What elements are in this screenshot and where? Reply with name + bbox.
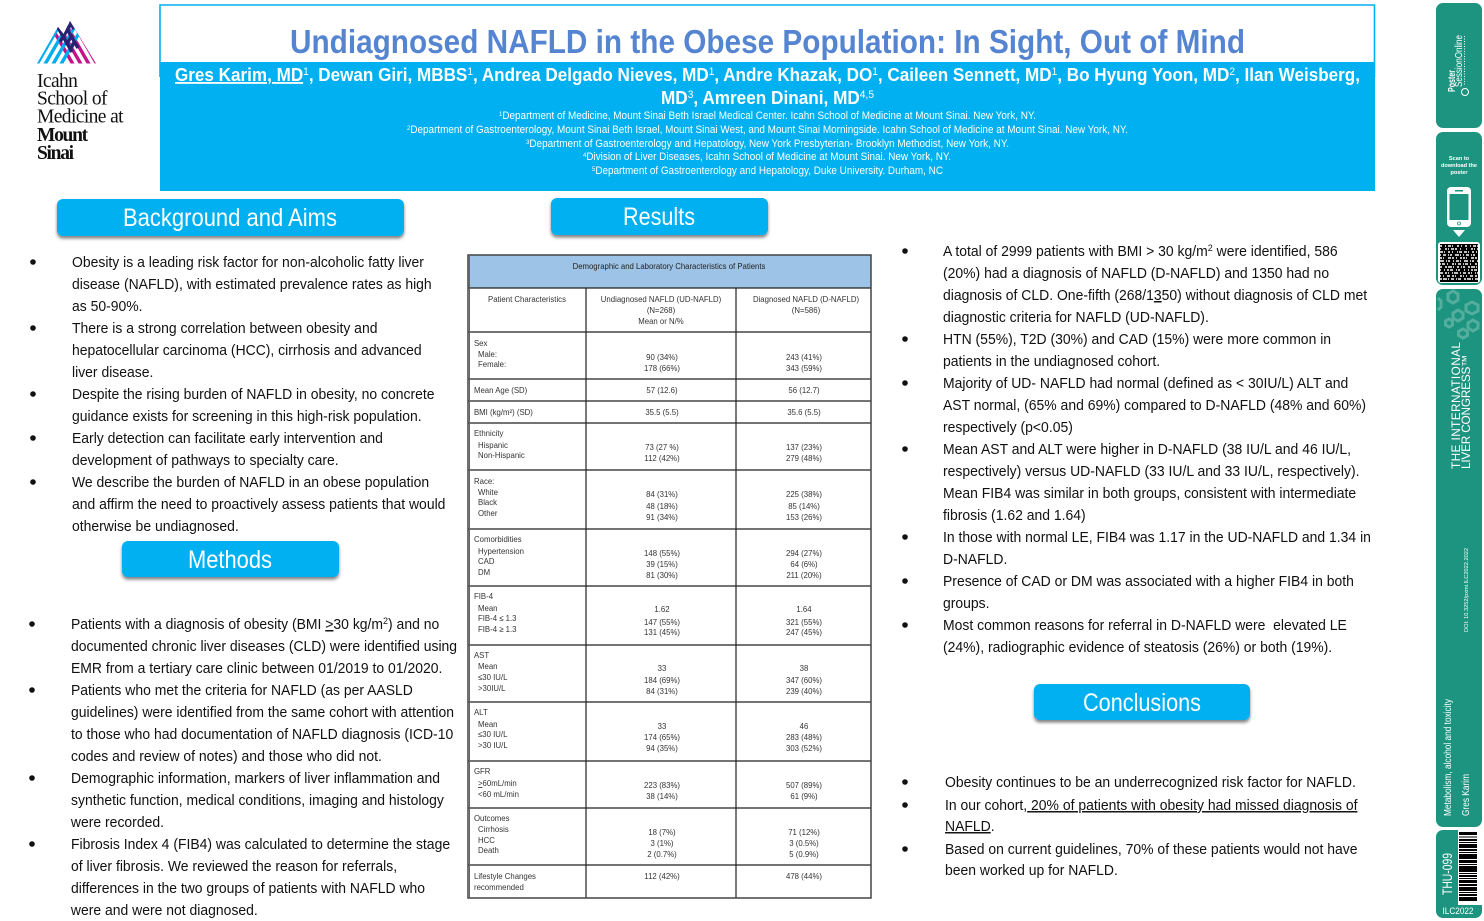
row: lifestyle changes	[474, 872, 822, 892]
row: ALT: ≤30 IU/L	[478, 730, 508, 739]
text block: methods bullets	[29, 616, 457, 919]
text block: results bullets: Presence of CAD or DM was associated with a higher FIB4 in both	[943, 574, 1354, 590]
text block: background bullets: liver disease.	[72, 365, 153, 381]
text block: background bullets: guidance exists for screening in this high-risk population.	[72, 409, 422, 425]
scan caption: download the	[1441, 163, 1477, 169]
text block: methods bullets: of liver fibrosis. We reviewed the reason for referrals,	[71, 859, 397, 875]
icon: phone	[1447, 187, 1471, 227]
panel: congress name and session	[1436, 289, 1482, 827]
icon: hexagon pattern	[1438, 291, 1478, 338]
text block: background bullets: development of pathways to specialty care.	[72, 453, 339, 469]
heading: Results	[551, 198, 768, 235]
text block: methods bullets: Patients with a diagnosis of obesity (BMI >30 kg/m	[71, 617, 383, 633]
text block: results bullets: groups.	[943, 596, 990, 612]
row: ethnicity: 112 (42%)	[644, 454, 680, 463]
row: comorbidities: 39 (15%)	[646, 560, 678, 569]
text block: methods bullets: Patients who met the criteria for NAFLD (as per AASLD	[71, 683, 413, 699]
row: FIB-4: 321 (55%)	[786, 618, 822, 627]
row: race	[474, 477, 822, 522]
row: AST: AST	[474, 651, 489, 660]
ILC2022 label: ILC2022	[1442, 906, 1474, 916]
row: FIB-4: FIB-4	[474, 592, 494, 601]
row: lifestyle changes: Lifestyle Changes	[474, 872, 536, 881]
row: ALT: 174 (65%)	[644, 733, 680, 742]
row: FIB-4: FIB-4 ≥ 1.3	[478, 625, 517, 634]
text block: methods bullets: 2	[383, 616, 388, 626]
scan caption	[1441, 156, 1477, 176]
text block: results bullets: (24%), radiographic evidence of steatosis (26%) or both (19%).	[943, 640, 1332, 656]
text block: conclusions bullets: NAFLD.	[945, 819, 995, 835]
row: ethnicity: 73 (27 %)	[645, 443, 679, 452]
text block: methods bullets: Demographic information, markers of liver inflammation and	[71, 771, 440, 787]
row: sex: 243 (41%)	[786, 353, 822, 362]
row: outcomes: Cirrhosis	[478, 825, 509, 834]
text block: background bullets: There is a strong correlation between obesity and	[72, 321, 377, 337]
authors: , Caileen Sennett, MD	[878, 64, 1052, 85]
panel: background and aims	[30, 199, 445, 535]
row: BMI: 35.5 (5.5)	[645, 408, 679, 417]
table: demographic and laboratory characteristics	[468, 255, 871, 898]
text block: background bullets: as 50-90%.	[72, 299, 143, 315]
text block: results bullets: AST normal, (65% and 69%) compared to D-NAFLD (48% and 60%)	[943, 398, 1366, 414]
text block: methods bullets: differences in the two groups of patients with NAFLD who	[71, 881, 425, 897]
row: GFR	[474, 767, 822, 801]
row: outcomes: 2 (0.7%)	[647, 850, 677, 859]
row: AST: Mean	[478, 662, 498, 671]
row: comorbidities: DM	[478, 568, 490, 577]
DOI: DOI: 10.3252/pxmi.ILC2022.2022	[1464, 548, 1470, 632]
table column headers: Patient Characteristics	[488, 295, 566, 304]
logo wordmark: School of	[37, 88, 108, 110]
row: mean age: Mean Age (SD)	[474, 386, 528, 395]
row: AST: 84 (31%)	[646, 687, 678, 696]
sidebar: congress strip	[1436, 3, 1482, 918]
row: BMI: BMI (kg/m²) (SD)	[474, 408, 533, 417]
row: outcomes	[474, 814, 820, 859]
text block: results bullets	[902, 243, 1371, 656]
table column headers: (N=268)	[647, 306, 676, 315]
row: lifestyle changes: recommended	[474, 883, 524, 892]
row: race: 84 (31%)	[646, 490, 678, 499]
session and author	[1442, 698, 1472, 816]
text block: results bullets: HTN (55%), T2D (30%) and CAD (15%) were more common in	[943, 332, 1331, 348]
row: sex: 90 (34%)	[646, 353, 678, 362]
row: outcomes: 5 (0.9%)	[789, 850, 819, 859]
row: sex	[474, 339, 822, 373]
logo wordmark: Sinai	[37, 143, 75, 164]
text block: methods bullets: to those who had documentation of NAFLD diagnosis (ICD-10	[71, 727, 453, 743]
heading: Background and Aims: Background and Aims	[123, 204, 337, 232]
row: FIB-4: Mean	[478, 604, 498, 613]
text block: methods bullets: documented chronic liver diseases (CLD) were identified using	[71, 639, 457, 655]
text block: methods bullets: were and were not diagnosed.	[70, 903, 258, 919]
row: ALT: 283 (48%)	[786, 733, 822, 742]
congress name	[1449, 342, 1473, 469]
affiliations: Division of Liver Diseases, Icahn School of Medicine at Mount Sinai. New York, NY.	[586, 151, 951, 163]
text block: background bullets: disease (NAFLD), with estimated prevalence rates as high	[72, 277, 432, 293]
row: comorbidities: Hypertension	[478, 547, 524, 556]
text block: results bullets: (20%) had a diagnosis of NAFLD (D-NAFLD) and 1350 had no	[943, 266, 1329, 282]
text block: results bullets: D-NAFLD.	[943, 552, 1007, 568]
row: ALT: 303 (52%)	[786, 744, 822, 753]
authors: 4,5	[860, 89, 874, 101]
authors: , Amreen Dinani, MD	[693, 87, 860, 108]
row: outcomes: Outcomes	[474, 814, 510, 823]
panel: poster session online	[1436, 3, 1482, 128]
affiliations: Department of Gastroenterology and Hepatology, Duke University. Durham, NC	[595, 165, 943, 177]
row: AST: 239 (40%)	[786, 687, 822, 696]
panel: conclusions	[902, 684, 1358, 879]
affiliations: 3	[526, 139, 530, 146]
text block: methods bullets: EMR from a tertiary care clinic between 01/2019 to 01/2020.	[71, 661, 442, 677]
text block: background bullets: We describe the burden of NAFLD in an obese population	[72, 475, 429, 491]
affiliations: Department of Gastroenterology and Hepatology, New York Presbyterian- Brooklyn Methodist, New York, NY.	[529, 138, 1009, 150]
panel: abstract code and barcode	[1436, 830, 1482, 918]
text block: conclusions bullets: In our cohort, 20% of patients with obesity had missed diagnosis of	[945, 798, 1358, 814]
text block: results bullets: respectively (p<0.05)	[943, 420, 1073, 436]
QR code	[1438, 242, 1480, 283]
scan caption: Scan to	[1449, 156, 1470, 162]
row: race: 91 (34%)	[646, 513, 678, 522]
row: GFR: 61 (9%)	[790, 792, 818, 801]
text block: background bullets: otherwise be undiagnosed.	[72, 519, 239, 535]
text block: results bullets: respectively) versus UD-NAFLD (33 IU/L and 33 IU/L, respectively).	[943, 464, 1359, 480]
row: race: 225 (38%)	[786, 490, 822, 499]
row: FIB-4: 247 (45%)	[786, 628, 822, 637]
text block: background bullets	[30, 255, 445, 535]
logo: Icahn School of Medicine at Mount Sinai	[36, 14, 124, 164]
row: ethnicity: 279 (48%)	[786, 454, 822, 463]
text block: methods bullets: were recorded.	[70, 815, 164, 831]
panel: poster session online: Poster	[1447, 70, 1458, 92]
row: ALT: 33	[658, 722, 667, 731]
affiliations: 1	[499, 111, 503, 118]
row: mean age: 57 (12.6)	[646, 386, 678, 395]
text block: methods bullets: ) and no	[388, 617, 439, 633]
text block: background bullets: hepatocellular carcinoma (HCC), cirrhosis and advanced	[72, 343, 422, 359]
row: outcomes: 3 (0.5%)	[789, 839, 819, 848]
row: GFR: <60 mL/min	[478, 790, 519, 799]
row: ALT: Mean	[478, 720, 498, 729]
row: BMI: 35.6 (5.5)	[787, 408, 821, 417]
row: GFR: GFR	[474, 767, 491, 776]
authors: 1	[872, 66, 878, 78]
heading: Background and Aims	[57, 199, 404, 236]
row: race: 48 (18%)	[646, 502, 678, 511]
affiliations	[407, 110, 1128, 177]
table title: Demographic and Laboratory Characteristics of Patients	[573, 262, 765, 271]
logo wordmark: Mount	[37, 125, 89, 146]
row: race: White	[478, 488, 498, 497]
row: AST: 33	[658, 664, 667, 673]
row: AST: 347 (60%)	[786, 676, 822, 685]
congress name: LIVER CONGRESS™	[1459, 355, 1473, 469]
row: ALT: 46	[800, 722, 809, 731]
row: BMI	[474, 408, 821, 417]
authors: , Ilan Weisberg,	[1235, 64, 1360, 85]
heading: Conclusions: Conclusions	[1083, 689, 1201, 717]
row: FIB-4: FIB-4 ≤ 1.3	[478, 614, 517, 623]
row: comorbidities: 81 (30%)	[646, 571, 678, 580]
row: outcomes: 18 (7%)	[648, 828, 676, 837]
row: AST	[474, 651, 822, 696]
row: lifestyle changes: 112 (42%)	[644, 872, 680, 881]
authors: 1	[1052, 66, 1057, 78]
table column headers: Mean or N/%	[638, 317, 684, 326]
row: outcomes: Death	[478, 846, 499, 855]
authors: 3	[688, 89, 693, 101]
scan caption: poster	[1450, 170, 1468, 176]
row: race: 85 (14%)	[788, 502, 820, 511]
row: ALT: 94 (35%)	[646, 744, 678, 753]
row: ALT: >30 IU/L	[478, 741, 508, 750]
heading: Results: Results	[623, 203, 695, 231]
row: comorbidities: CAD	[478, 557, 495, 566]
row: race: 153 (26%)	[786, 513, 822, 522]
text block: methods bullets: synthetic function, medical conditions, imaging and histology	[71, 793, 445, 809]
row: sex: Sex	[474, 339, 487, 348]
panel: methods	[29, 541, 457, 919]
logo wordmark	[37, 71, 124, 164]
table column headers	[488, 295, 859, 326]
row: FIB-4: 131 (45%)	[644, 628, 680, 637]
logo wordmark: Medicine at	[37, 106, 124, 128]
logo wordmark: Icahn	[37, 71, 78, 92]
row: sex: Female:	[478, 360, 506, 369]
row: mean age	[474, 386, 820, 395]
heading: Methods: Methods	[188, 546, 272, 574]
row: FIB-4: 1.64	[796, 605, 812, 614]
row: outcomes: 71 (12%)	[788, 828, 820, 837]
text block: results bullets: diagnosis of CLD. One-fifth (268/1350) without diagnosis of CLD met	[943, 288, 1367, 304]
authors: 2	[1229, 66, 1235, 78]
panel: scan to download	[1436, 132, 1482, 285]
table column headers: (N=586)	[792, 306, 821, 315]
text block: results bullets: were identified, 586	[1213, 244, 1338, 260]
authors: , Andre Khazak, DO	[714, 64, 872, 85]
authors: , Dewan Giri, MBBS	[309, 64, 467, 85]
row: ethnicity: Hispanic	[478, 441, 508, 450]
affiliations: Department of Medicine, Mount Sinai Beth Israel Medical Center. Icahn School of Medicine at Mount Sinai. New York, NY.	[502, 110, 1036, 122]
text block: conclusions bullets: Obesity continues to be an underrecognized risk factor for NAFLD.	[945, 775, 1356, 791]
row: comorbidities: 148 (55%)	[644, 549, 680, 558]
authors: MD	[661, 87, 690, 108]
authors: , Bo Hyung Yoon, MD	[1057, 64, 1229, 85]
row: ALT	[474, 708, 822, 753]
affiliations: 2	[407, 125, 411, 132]
text block: results bullets: Mean AST and ALT were higher in D-NAFLD (38 IU/L and 46 IU/L,	[943, 442, 1351, 458]
row: FIB-4: 1.62	[654, 605, 670, 614]
row: outcomes: 3 (1%)	[651, 839, 674, 848]
row: AST: >30IU/L	[478, 684, 506, 693]
authors: 1	[709, 66, 714, 78]
title: Undiagnosed NAFLD in the Obese Population: In Sight, Out of Mind	[290, 24, 1245, 61]
row: ethnicity: Non-Hispanic	[478, 451, 525, 460]
row: race: Other	[478, 509, 498, 518]
row: comorbidities: 294 (27%)	[786, 549, 822, 558]
row: race: Race:	[474, 477, 494, 486]
text block: background bullets: Despite the rising burden of NAFLD in obesity, no concrete	[72, 387, 435, 403]
affiliations: 5	[592, 166, 596, 173]
row: comorbidities: 64 (6%)	[790, 560, 818, 569]
panel: poster session online: SessionOnline	[1454, 35, 1465, 87]
row: sex: 343 (59%)	[786, 364, 822, 373]
row: ALT: ALT	[474, 708, 488, 717]
session and author: Metabolism, alcohol and toxicity	[1442, 698, 1454, 816]
affiliations: 4	[583, 152, 587, 159]
row: comorbidities: Comorbidities	[474, 535, 522, 544]
row: mean age: 56 (12.7)	[788, 386, 820, 395]
text block: conclusions bullets: Based on current guidelines, 70% of these patients would not have	[945, 842, 1358, 858]
row: FIB-4: 147 (55%)	[644, 618, 680, 627]
text block: results bullets: In those with normal LE, FIB4 was 1.17 in the UD-NAFLD and 1.34 in	[943, 530, 1371, 546]
row: ethnicity	[474, 429, 822, 463]
text block: results bullets: diagnostic criteria for NAFLD (UD-NAFLD).	[943, 310, 1209, 326]
text block: methods bullets: guidelines) were identified from the same cohort with attention	[71, 705, 454, 721]
row: sex: 178 (66%)	[644, 364, 680, 373]
row: AST: 184 (69%)	[644, 676, 680, 685]
text block: results bullets: A total of 2999 patients with BMI > 30 kg/m	[943, 244, 1208, 260]
text block: background bullets: and affirm the need to proactively assess patients that would	[72, 497, 445, 513]
heading: Conclusions	[1034, 684, 1250, 720]
text block: results bullets: patients in the undiagnosed cohort.	[943, 354, 1160, 370]
text block: background bullets: Obesity is a leading risk factor for non-alcoholic fatty liver	[72, 255, 424, 271]
text block: results bullets: Mean FIB4 was similar in both groups, consistent with intermediate	[943, 486, 1356, 502]
authors	[175, 64, 1360, 108]
authors: 1	[467, 66, 473, 78]
table column headers: Undiagnosed NAFLD (UD-NAFLD)	[601, 295, 722, 304]
header banner	[160, 5, 1375, 191]
congress name: THE INTERNATIONAL	[1449, 342, 1463, 469]
row: race: Black	[478, 498, 498, 507]
text block: conclusions bullets: been worked up for NAFLD.	[945, 863, 1118, 879]
affiliations: Department of Gastroenterology, Mount Sinai Beth Israel, Mount Sinai West, and Mount Sinai Morningside. Icahn School of Medicine at Mount Sinai. New York, NY.	[410, 124, 1128, 136]
authors: 1	[303, 66, 309, 78]
row: sex: Male:	[478, 350, 497, 359]
text block: conclusions bullets	[902, 775, 1358, 879]
row: AST: 38	[800, 664, 809, 673]
row: ethnicity: Ethnicity	[474, 429, 503, 438]
abstract code: THU-099	[1439, 853, 1455, 895]
row: GFR: 507 (89%)	[786, 781, 822, 790]
icon: down arrow	[1453, 230, 1465, 237]
row: ethnicity: 137 (23%)	[786, 443, 822, 452]
text block: results bullets: Most common reasons for referral in D-NAFLD were elevated LE	[943, 618, 1347, 634]
icon: logo triangle stripes	[37, 21, 96, 64]
row: comorbidities	[474, 535, 822, 580]
row: AST: ≤30 IU/L	[478, 673, 508, 682]
row: FIB-4	[474, 592, 822, 637]
text block: results bullets: Majority of UD- NAFLD had normal (defined as < 30IU/L) ALT and	[943, 376, 1348, 392]
row: outcomes: HCC	[478, 836, 495, 845]
text block: background bullets: Early detection can facilitate early intervention and	[72, 431, 383, 447]
authors: Gres Karim, MD	[175, 64, 303, 85]
session and author: Gres Karim	[1460, 774, 1472, 816]
heading: Methods	[122, 541, 339, 577]
row: lifestyle changes: 478 (44%)	[786, 872, 822, 881]
row: GFR: 223 (83%)	[644, 781, 680, 790]
table column headers: Diagnosed NAFLD (D-NAFLD)	[753, 295, 859, 304]
row: comorbidities: 211 (20%)	[786, 571, 822, 580]
barcode	[1459, 832, 1477, 901]
text block: results bullets: 2	[1208, 243, 1213, 253]
row: GFR: >60mL/min	[478, 779, 517, 788]
authors: , Andrea Delgado Nieves, MD	[473, 64, 709, 85]
text block: methods bullets: codes and review of notes) and those who did not.	[71, 749, 382, 765]
row: GFR: 38 (14%)	[646, 792, 678, 801]
text block: methods bullets: Fibrosis Index 4 (FIB4) was calculated to determine the stage	[71, 837, 450, 853]
text block: results bullets: fibrosis (1.62 and 1.64)	[943, 508, 1086, 524]
